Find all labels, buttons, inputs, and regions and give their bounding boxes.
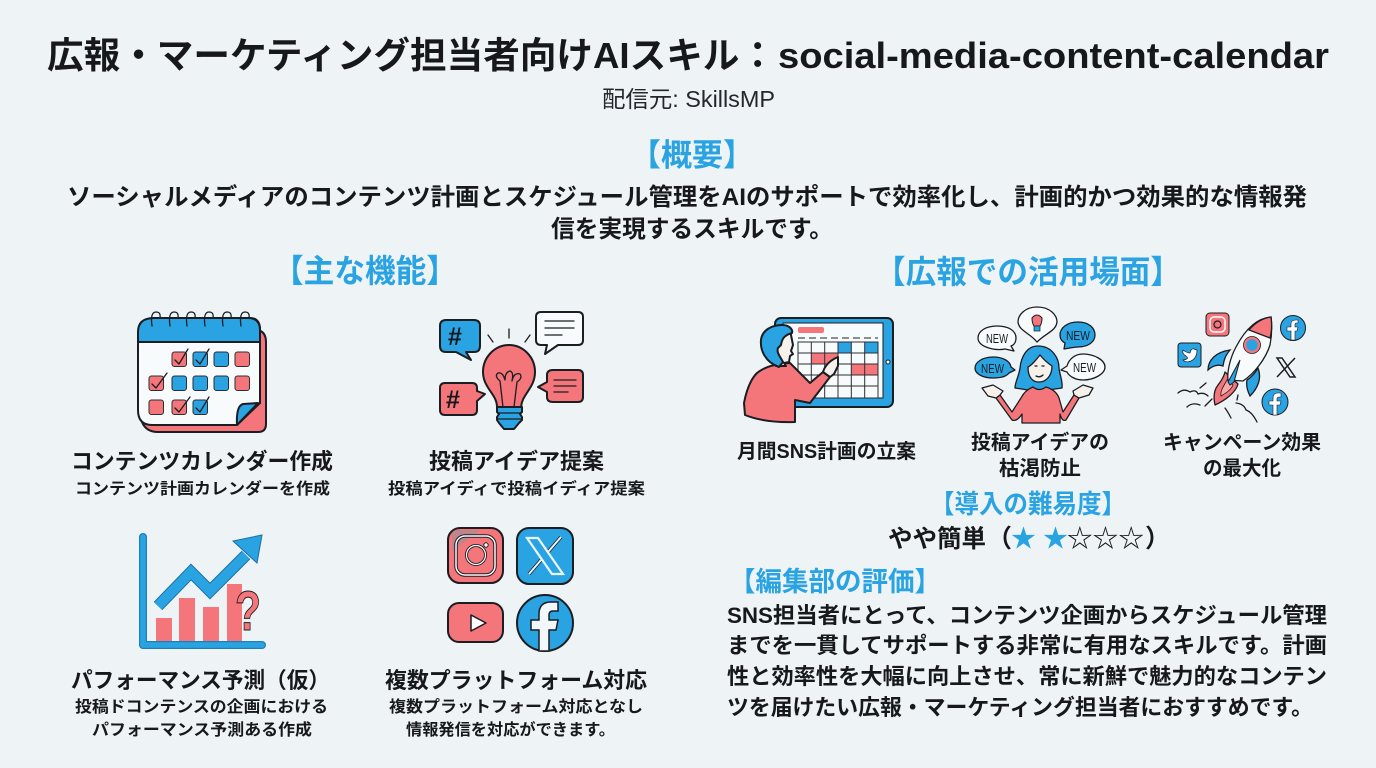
source line: 配信元: SkillsMP bbox=[602, 86, 775, 112]
panel: monthly SNS planning bbox=[737, 318, 916, 463]
icon: social platforms bbox=[448, 528, 573, 651]
title: 広報・マーケティング担当者向けAIスキル： bbox=[47, 35, 776, 76]
overview text: ソーシャルメディアのコンテンツ計画とスケジュール管理をAIのサポートで効率化し、計画的かつ効果的な情報発 bbox=[67, 183, 1307, 211]
use case label bbox=[1163, 431, 1321, 480]
feature description: パフォーマンス予測ある作成 bbox=[92, 720, 312, 739]
icon: woman with NEW bubbles: NEW bbox=[986, 331, 1009, 346]
feature title: コンテンツカレンダー作成 bbox=[71, 449, 333, 474]
overview text: 信を実現するスキルです。 bbox=[551, 216, 833, 243]
feature description: 複数プラットフォーム対応となし bbox=[389, 697, 643, 716]
icon: growth chart bbox=[143, 535, 262, 645]
panel: multi platform feature bbox=[385, 528, 647, 739]
feature description: 投稿アイディで投稿イディア提案 bbox=[388, 479, 645, 498]
difficulty rating: ★ bbox=[1043, 525, 1068, 553]
use case label: キャンペーン効果 bbox=[1163, 431, 1321, 454]
difficulty rating: やや簡単 bbox=[888, 525, 986, 553]
heading: PR use cases: 【広報での活用場面】 bbox=[875, 254, 1181, 290]
feature title: パフォーマンス予測（仮） bbox=[71, 668, 330, 693]
panel: avoid idea drought bbox=[971, 307, 1109, 480]
title bbox=[47, 35, 1329, 76]
feature description bbox=[75, 697, 328, 739]
editorial review text: SNS担当者にとって、コンテンツ企画からスケジュール管理 bbox=[727, 603, 1327, 628]
panel: maximise campaign effect bbox=[1163, 313, 1321, 480]
icon: woman with NEW bubbles: NEW bbox=[1066, 328, 1091, 343]
difficulty rating: ） bbox=[1145, 525, 1170, 553]
editorial review text bbox=[727, 603, 1327, 720]
title: social-media-content-calendar bbox=[778, 35, 1329, 76]
editorial review text: までを一貫してサポートする非常に有用なスキルです。計画 bbox=[727, 633, 1327, 658]
feature title: 複数プラットフォーム対応 bbox=[385, 668, 647, 693]
icon: person pointing at tablet calendar bbox=[744, 318, 893, 422]
difficulty rating: ☆☆☆ bbox=[1067, 525, 1144, 553]
difficulty rating: （ bbox=[987, 525, 1012, 553]
editorial review text: 性と効率性を大幅に向上させ、常に新鮮で魅力的なコンテン bbox=[727, 664, 1327, 689]
heading: main features: 【主な機能】 bbox=[273, 253, 457, 289]
icon: calendar bbox=[138, 312, 266, 432]
use case label: 月間SNS計画の立案 bbox=[737, 440, 916, 463]
panel: performance prediction feature bbox=[71, 535, 330, 739]
feature description: コンテンツ計画カレンダーを作成 bbox=[75, 479, 330, 498]
heading: editorial review: 【編集部の評価】 bbox=[729, 567, 941, 597]
overview text bbox=[67, 183, 1307, 243]
use case label: の最大化 bbox=[1203, 457, 1281, 480]
heading: overview: 【概要】 bbox=[630, 138, 754, 173]
editorial review text: ツを届けたい広報・マーケティング担当者におすすめです。 bbox=[727, 695, 1313, 720]
icon: light bulb with speech bubbles: # bbox=[448, 323, 462, 351]
feature description: 投稿ドコンテンスの企画における bbox=[75, 697, 328, 716]
icon: rocket with social logos bbox=[1178, 313, 1306, 422]
use case label: 枯渇防止 bbox=[999, 457, 1081, 480]
difficulty rating bbox=[888, 525, 1170, 553]
icon: light bulb with speech bubbles bbox=[440, 312, 583, 429]
panel: content calendar feature bbox=[71, 312, 333, 498]
icon: woman with NEW bubbles bbox=[975, 307, 1105, 423]
panel: post ideas feature bbox=[388, 312, 645, 498]
heading: difficulty: 【導入の難易度】 bbox=[930, 489, 1126, 519]
use case label: 投稿アイデアの bbox=[971, 430, 1109, 454]
icon: growth chart: ? bbox=[235, 579, 261, 642]
feature description: 情報発信を対応ができます。 bbox=[406, 720, 615, 739]
feature description bbox=[389, 697, 643, 739]
icon: light bulb with speech bubbles: # bbox=[446, 386, 460, 414]
icon: woman with NEW bubbles: NEW bbox=[981, 361, 1005, 376]
feature title: 投稿アイデア提案 bbox=[429, 449, 604, 474]
icon: woman with NEW bubbles: NEW bbox=[1073, 360, 1097, 375]
difficulty rating: ★ bbox=[1011, 525, 1036, 553]
use case label bbox=[971, 430, 1109, 480]
